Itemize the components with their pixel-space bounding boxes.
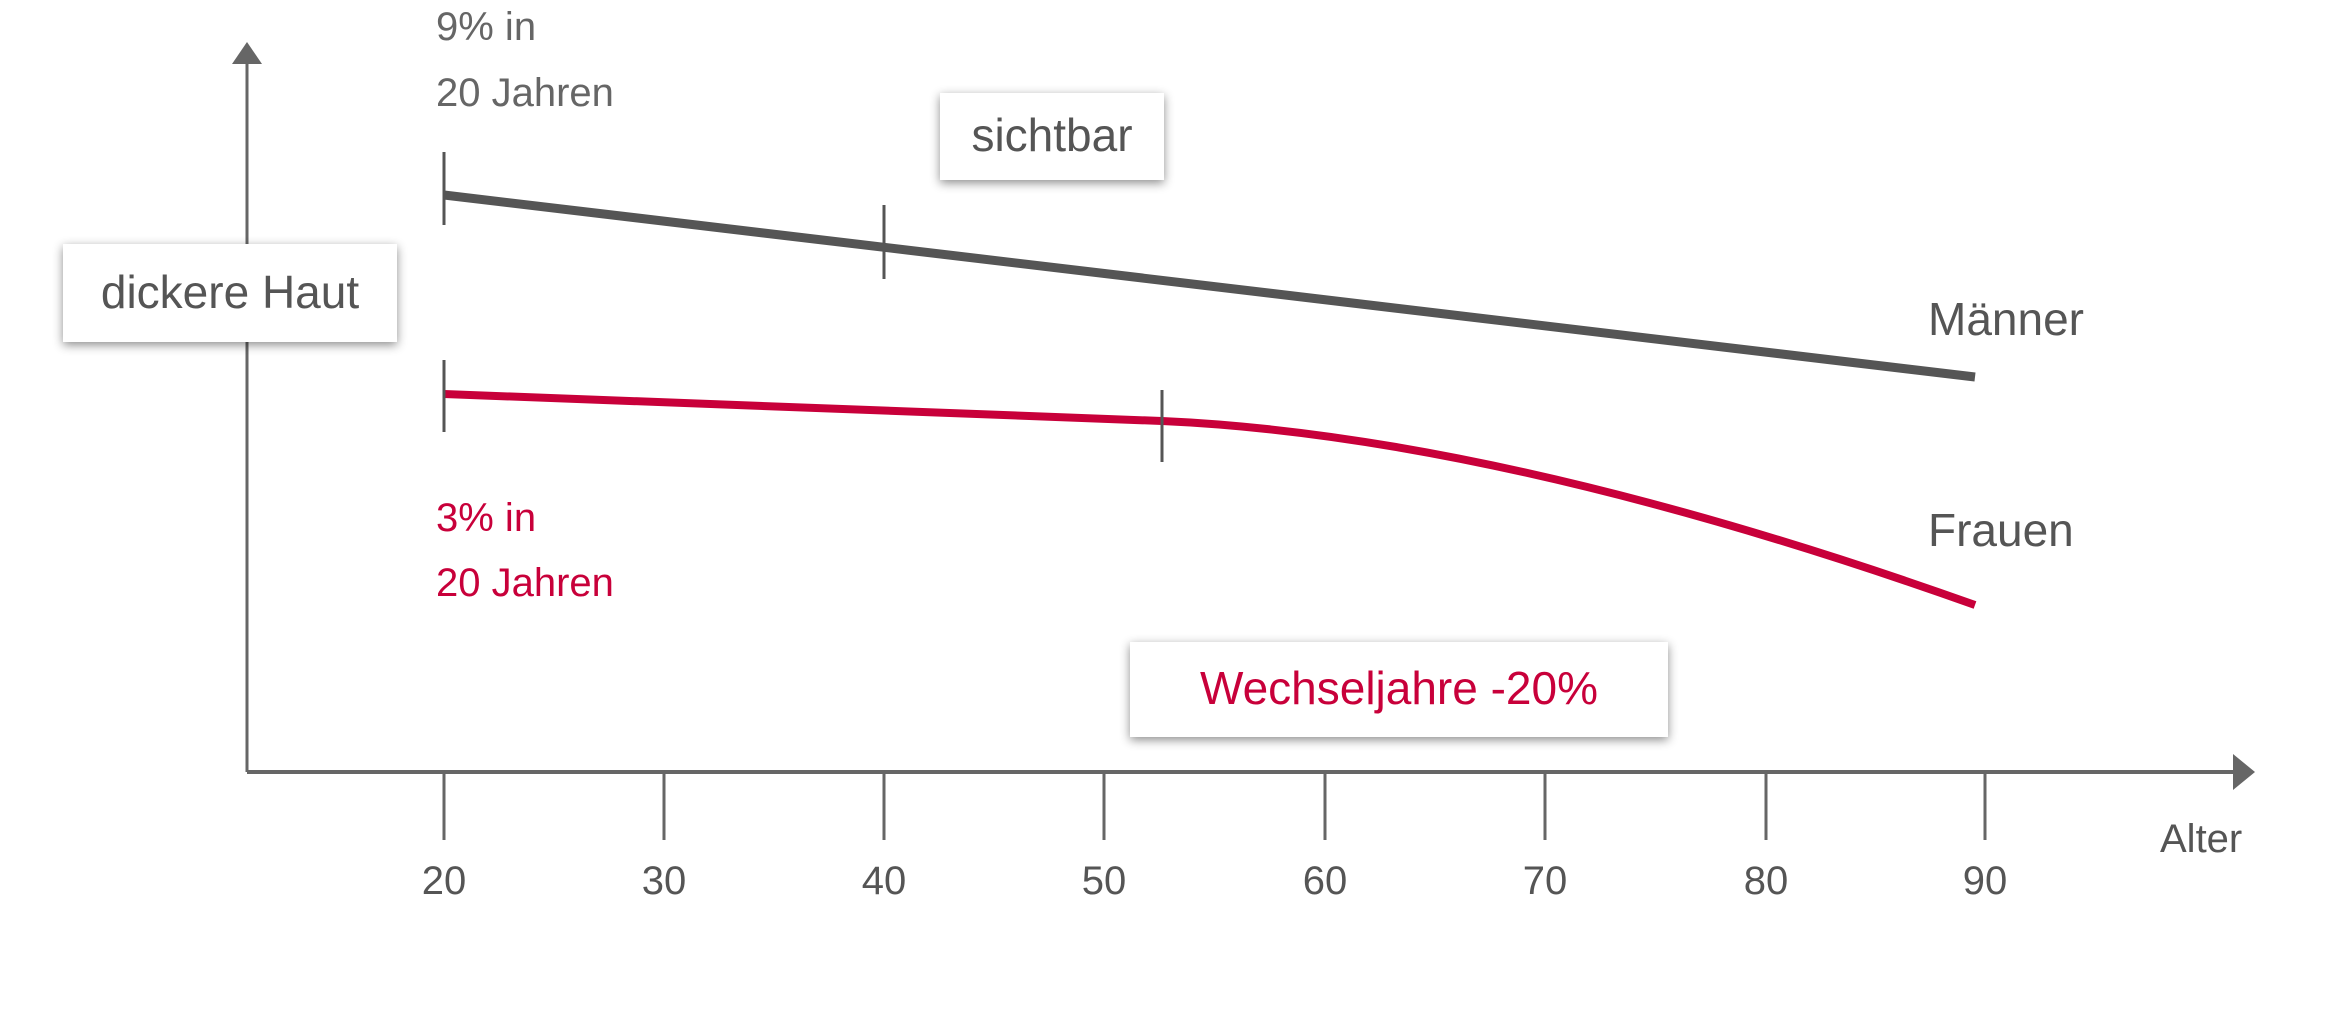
callout: sichtbar: sichtbar (971, 109, 1133, 161)
y axis (232, 42, 262, 772)
x axis labels (422, 859, 2007, 903)
axis title: Alter: Alter (2160, 817, 2242, 861)
label: Frauen: Frauen (1928, 504, 2074, 556)
label: Männer: Männer (1928, 293, 2084, 345)
annotation: 3% in 20 Jahren: 20 Jahren (436, 561, 614, 605)
x axis labels: 20 (422, 859, 466, 903)
callout: dickere Haut: dickere Haut (101, 266, 359, 318)
line: Frauen (444, 360, 1975, 605)
x axis labels: 60 (1303, 859, 1347, 903)
line: Männer (444, 152, 1975, 377)
callout: Wechseljahre -20% (1130, 642, 1668, 737)
annotation: 9% in 20 Jahren: 9% in (436, 5, 536, 49)
callout: sichtbar (940, 93, 1164, 180)
x axis labels: 40 (862, 859, 906, 903)
x axis labels: 90 (1963, 859, 2007, 903)
x axis labels: 80 (1744, 859, 1788, 903)
x axis labels: 70 (1523, 859, 1567, 903)
callout: dickere Haut (63, 244, 397, 342)
annotation: 9% in 20 Jahren: 20 Jahren (436, 71, 614, 115)
x axis (247, 754, 2255, 840)
callout: Wechseljahre -20%: Wechseljahre -20% (1200, 662, 1598, 714)
annotation: 3% in 20 Jahren: 3% in (436, 496, 536, 540)
x axis labels: 50 (1082, 859, 1126, 903)
x axis labels: 30 (642, 859, 686, 903)
